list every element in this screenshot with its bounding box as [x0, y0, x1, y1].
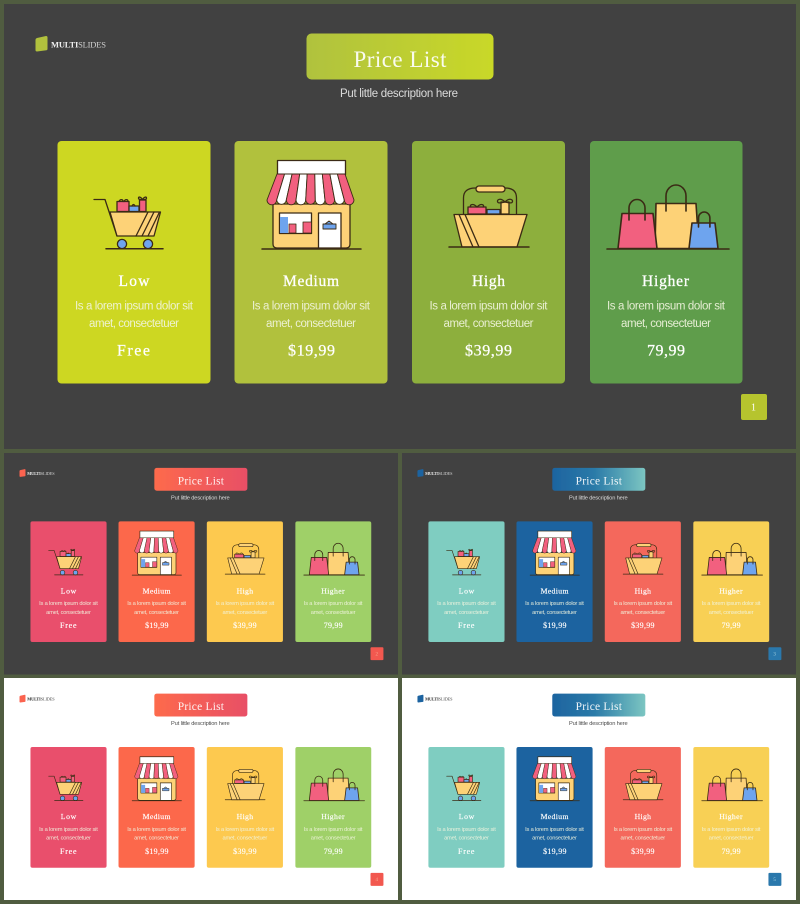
card: High	[412, 141, 565, 384]
heading: Medium: Medium	[283, 273, 339, 290]
icon: shopping cart	[49, 549, 83, 575]
page number badge	[370, 647, 383, 660]
description: Higher: Is a lorem ipsum dolor sit	[304, 601, 363, 607]
page number badge	[741, 394, 767, 420]
description: Higher: amet, consectetuer	[311, 610, 356, 616]
price: 79,99: 79,99	[722, 847, 741, 856]
description: Medium: Is a lorem ipsum dolor sit	[525, 601, 584, 607]
heading: Medium: Medium	[143, 812, 171, 821]
price: $19,99: $19,99	[543, 621, 566, 630]
icon: gift basket	[225, 769, 265, 800]
icon: storefront	[132, 757, 181, 801]
logo: MULTISLIDES	[425, 471, 453, 476]
price: $39,99: $39,99	[233, 621, 257, 630]
icon: shopping bags	[702, 769, 762, 801]
logo	[20, 695, 55, 703]
title banner: Price List	[576, 701, 623, 713]
description: Low: amet, consectetuer	[46, 836, 91, 842]
icon: shopping bags	[304, 543, 365, 575]
subtitle: Put little description here	[569, 495, 628, 501]
card: Low	[30, 521, 107, 642]
heading: Medium: Medium	[541, 586, 568, 595]
page number badge: 3	[773, 652, 776, 657]
card: Higher	[693, 747, 769, 868]
card: Higher	[693, 521, 769, 642]
logo: MULTISLIDES	[51, 40, 106, 50]
card: Medium	[234, 141, 388, 384]
heading: Higher: Higher	[642, 273, 690, 290]
description: Higher: amet, consectetuer	[621, 318, 711, 330]
icon: shopping cart	[49, 775, 83, 801]
title banner	[552, 468, 645, 491]
price: $39,99: $39,99	[465, 342, 512, 360]
title banner: Price List	[178, 476, 225, 488]
icon: gift basket	[623, 544, 663, 574]
icon: shopping bags	[607, 185, 729, 249]
card: Medium	[119, 521, 195, 642]
icon: shopping cart	[94, 197, 163, 249]
panel: small slide, dark blue theme	[402, 453, 796, 674]
logo	[417, 695, 453, 703]
description: Higher: Is a lorem ipsum dolor sit	[702, 601, 761, 607]
page number badge: 5	[773, 878, 776, 883]
card: Medium	[119, 747, 195, 868]
logo	[36, 36, 106, 52]
icon: shopping bags	[702, 543, 762, 575]
description: High: amet, consectetuer	[222, 836, 267, 842]
title banner: Price List	[178, 701, 225, 713]
icon: shopping bags	[304, 769, 365, 801]
page number badge: 2	[375, 652, 378, 657]
price: $19,99: $19,99	[145, 621, 169, 630]
description: Medium: amet, consectetuer	[134, 836, 179, 842]
heading: High: High	[472, 273, 505, 290]
description: High: Is a lorem ipsum dolor sit	[430, 300, 548, 312]
icon: shopping cart	[447, 549, 481, 575]
icon: gift basket	[449, 186, 529, 247]
title banner: Price List	[354, 47, 447, 72]
heading: High: High	[237, 812, 253, 821]
title banner	[552, 694, 645, 716]
title banner: Price List	[576, 476, 623, 488]
heading: Low: Low	[118, 273, 150, 290]
logo: MULTISLIDES	[27, 697, 55, 702]
logo: MULTISLIDES	[27, 471, 55, 476]
title banner	[154, 694, 247, 716]
icon: storefront	[132, 531, 181, 575]
heading: Higher: Higher	[719, 586, 743, 595]
description: Medium: amet, consectetuer	[134, 610, 179, 616]
description: Medium: Is a lorem ipsum dolor sit	[525, 827, 584, 833]
price: 79,99: 79,99	[324, 621, 343, 630]
description: Higher: Is a lorem ipsum dolor sit	[607, 300, 726, 312]
card: Low	[58, 141, 210, 384]
panel: small slide, light blue theme	[402, 678, 796, 900]
subtitle: Put little description here	[171, 721, 230, 727]
price: 79,99: 79,99	[647, 342, 685, 360]
card: Higher	[295, 747, 371, 868]
logo: MULTISLIDES	[425, 697, 453, 702]
card: Low	[428, 521, 505, 642]
title banner	[306, 34, 494, 80]
panel: small slide, dark warm theme	[4, 453, 398, 674]
page number badge: 4	[375, 878, 378, 883]
description: Higher: amet, consectetuer	[311, 836, 356, 842]
description: Low: Is a lorem ipsum dolor sit	[39, 827, 98, 833]
heading: Low: Low	[61, 812, 77, 821]
description: Higher: Is a lorem ipsum dolor sit	[702, 827, 761, 833]
price: 79,99: 79,99	[722, 621, 741, 630]
description: Low: amet, consectetuer	[89, 318, 179, 330]
description: Low: Is a lorem ipsum dolor sit	[39, 601, 98, 607]
description: High: Is a lorem ipsum dolor sit	[216, 827, 275, 833]
description: Medium: Is a lorem ipsum dolor sit	[252, 300, 371, 312]
heading: Low: Low	[459, 812, 475, 821]
subtitle: Put little description here	[340, 88, 458, 100]
heading: Low: Low	[459, 586, 475, 595]
panel: small slide, light warm theme	[4, 678, 398, 900]
icon: storefront	[530, 531, 579, 575]
card: Low	[30, 747, 107, 868]
icon: gift basket	[623, 769, 663, 800]
price: $19,99: $19,99	[288, 342, 335, 360]
price: $19,99: $19,99	[145, 847, 169, 856]
description: Low: amet, consectetuer	[444, 836, 489, 842]
price: Free: Free	[60, 847, 77, 856]
description: Medium: amet, consectetuer	[532, 836, 577, 842]
price: Free: Free	[117, 342, 150, 360]
heading: Higher: Higher	[719, 812, 743, 821]
card: High	[207, 747, 283, 868]
card: Higher	[295, 521, 371, 642]
heading: Higher: Higher	[321, 812, 345, 821]
icon: storefront	[262, 160, 361, 249]
card: Higher	[590, 141, 742, 384]
heading: Low: Low	[61, 586, 77, 595]
heading: Medium: Medium	[541, 812, 568, 821]
description: High: Is a lorem ipsum dolor sit	[613, 601, 673, 607]
description: Medium: amet, consectetuer	[532, 610, 577, 616]
card: High	[605, 521, 681, 642]
description: Medium: Is a lorem ipsum dolor sit	[127, 827, 186, 833]
page number badge: 1	[751, 402, 756, 414]
price: 79,99: 79,99	[324, 847, 343, 856]
price: $39,99: $39,99	[631, 847, 655, 856]
description: Low: amet, consectetuer	[444, 610, 489, 616]
description: High: amet, consectetuer	[222, 610, 267, 616]
card: High	[207, 521, 283, 642]
icon: shopping cart	[447, 775, 481, 801]
description: Medium: Is a lorem ipsum dolor sit	[127, 601, 186, 607]
description: Higher: amet, consectetuer	[709, 610, 754, 616]
logo	[20, 469, 55, 477]
card: Medium	[516, 747, 593, 868]
subtitle: Put little description here	[171, 495, 230, 501]
price: Free: Free	[458, 847, 475, 856]
heading: High: High	[635, 586, 651, 595]
description: High: amet, consectetuer	[620, 836, 665, 842]
description: Higher: Is a lorem ipsum dolor sit	[304, 827, 363, 833]
page number badge	[768, 873, 781, 886]
description: Low: Is a lorem ipsum dolor sit	[437, 827, 496, 833]
description: Medium: amet, consectetuer	[266, 318, 356, 330]
description: High: Is a lorem ipsum dolor sit	[613, 827, 673, 833]
description: High: amet, consectetuer	[620, 610, 665, 616]
price: Free: Free	[458, 621, 475, 630]
price: $19,99: $19,99	[543, 847, 566, 856]
title banner	[154, 468, 247, 491]
heading: High: High	[237, 586, 253, 595]
heading: High: High	[635, 812, 651, 821]
description: Low: amet, consectetuer	[46, 610, 91, 616]
price: $39,99: $39,99	[233, 847, 257, 856]
subtitle: Put little description here	[569, 721, 628, 727]
page number badge	[370, 873, 383, 886]
description: Higher: amet, consectetuer	[709, 836, 754, 842]
description: Low: Is a lorem ipsum dolor sit	[437, 601, 496, 607]
heading: Medium: Medium	[143, 586, 171, 595]
description: High: amet, consectetuer	[444, 318, 534, 330]
card: Low	[428, 747, 505, 868]
logo	[417, 469, 453, 477]
description: High: Is a lorem ipsum dolor sit	[216, 601, 275, 607]
price: Free: Free	[60, 621, 77, 630]
card: Medium	[516, 521, 593, 642]
page number badge	[768, 647, 781, 660]
price: $39,99: $39,99	[631, 621, 655, 630]
panel: main slide, green theme	[4, 4, 796, 449]
icon: storefront	[530, 757, 579, 801]
heading: Higher: Higher	[321, 586, 345, 595]
description: Low: Is a lorem ipsum dolor sit	[75, 300, 194, 312]
icon: gift basket	[225, 544, 265, 574]
card: High	[605, 747, 681, 868]
